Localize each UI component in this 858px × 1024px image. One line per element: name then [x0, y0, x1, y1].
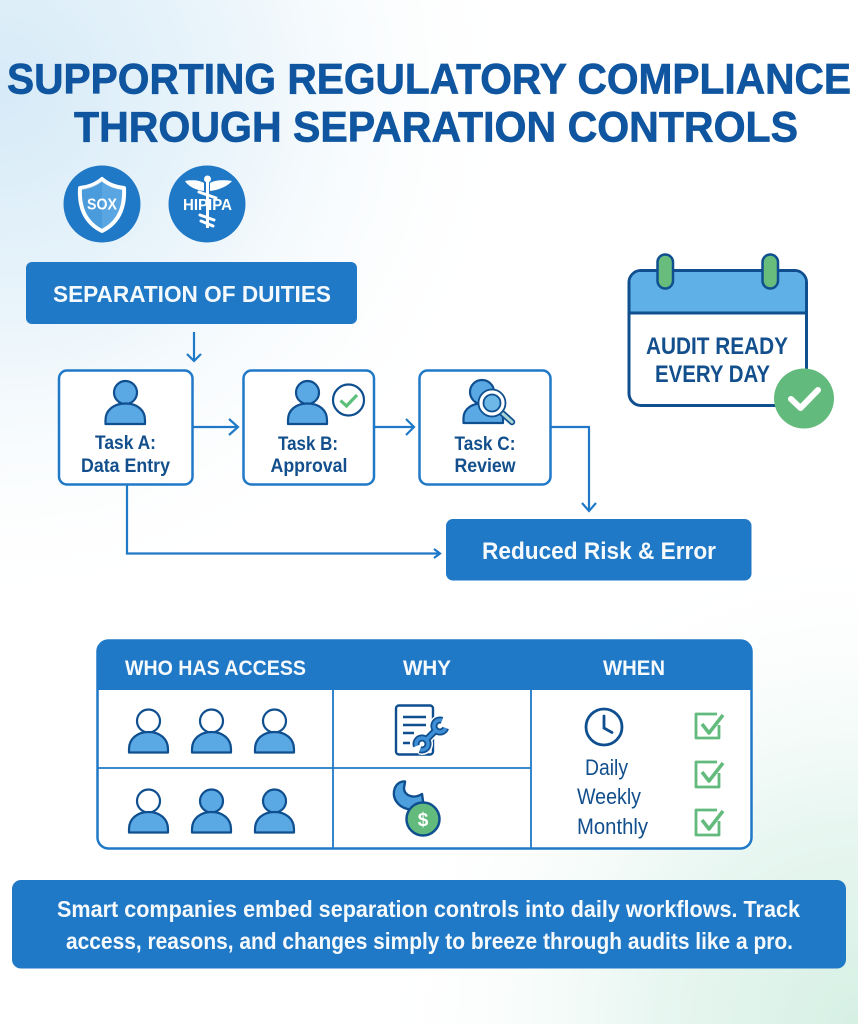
table header — [97, 640, 752, 690]
arrow: Task C to reduced risk — [551, 427, 596, 511]
panel: Task C: Review — [454, 456, 516, 477]
icon: people row 2 — [129, 790, 294, 832]
table frame — [98, 640, 752, 848]
panel: access table — [97, 640, 752, 848]
panel: Task A: Task A: — [95, 433, 156, 454]
icon: audit ready calendar — [629, 254, 834, 428]
text: frequencies: Monthly — [577, 814, 648, 839]
icon: document with wrench — [396, 706, 446, 754]
panel: Task B — [244, 370, 374, 484]
table header: WHEN — [603, 657, 665, 680]
panel: Task A — [59, 370, 192, 484]
icon: SOX badge: SOX — [87, 196, 118, 214]
text: frequencies — [577, 755, 648, 839]
panel: Task B: Approval — [270, 456, 348, 477]
panel: Task B: Task B: — [278, 434, 338, 455]
icon: clock — [586, 709, 622, 745]
text: frequencies: Weekly — [577, 784, 641, 809]
callout: closing message: Smart companies embed separation controls into daily workflows. Track — [57, 896, 800, 922]
icon: HIPAA badge — [168, 166, 246, 242]
icon: green checkboxes — [696, 714, 723, 835]
arrow: Task B to Task C — [374, 419, 414, 435]
panel: Task C — [420, 370, 550, 484]
table header: WHO HAS ACCESS — [125, 657, 306, 680]
arrow: Task A to Task B — [193, 419, 238, 435]
icon: SOX badge — [64, 166, 140, 242]
title — [7, 56, 851, 152]
title: THROUGH SEPARATION CONTROLS — [74, 104, 798, 152]
icon: wrench with dollar coin: $ — [418, 810, 429, 831]
heading: separation of duties: SEPARATION OF DUITIES — [53, 281, 331, 307]
table header: WHY — [403, 657, 451, 680]
panel: Task A: Data Entry — [81, 456, 170, 477]
icon: HIPAA badge: HIPIPA — [183, 197, 232, 214]
arrow: heading to tasks — [187, 332, 201, 361]
callout: reduced risk and error — [446, 519, 752, 580]
icon: audit ready calendar: AUDIT READY — [646, 333, 788, 360]
icon: wrench with dollar coin — [394, 781, 440, 836]
callout: closing message: access, reasons, and changes simply to breeze through audits like a pro. — [66, 928, 793, 954]
arrow: Task A to reduced risk — [127, 485, 440, 558]
icon: audit ready calendar: EVERY DAY — [655, 361, 770, 388]
callout: closing message — [12, 880, 846, 968]
text: frequencies: Daily — [585, 755, 628, 780]
heading: separation of duties — [26, 262, 357, 324]
panel: Task C: Task C: — [454, 434, 516, 455]
icon: people row 1 — [129, 710, 294, 752]
callout: reduced risk and error: Reduced Risk & Error — [482, 538, 716, 565]
